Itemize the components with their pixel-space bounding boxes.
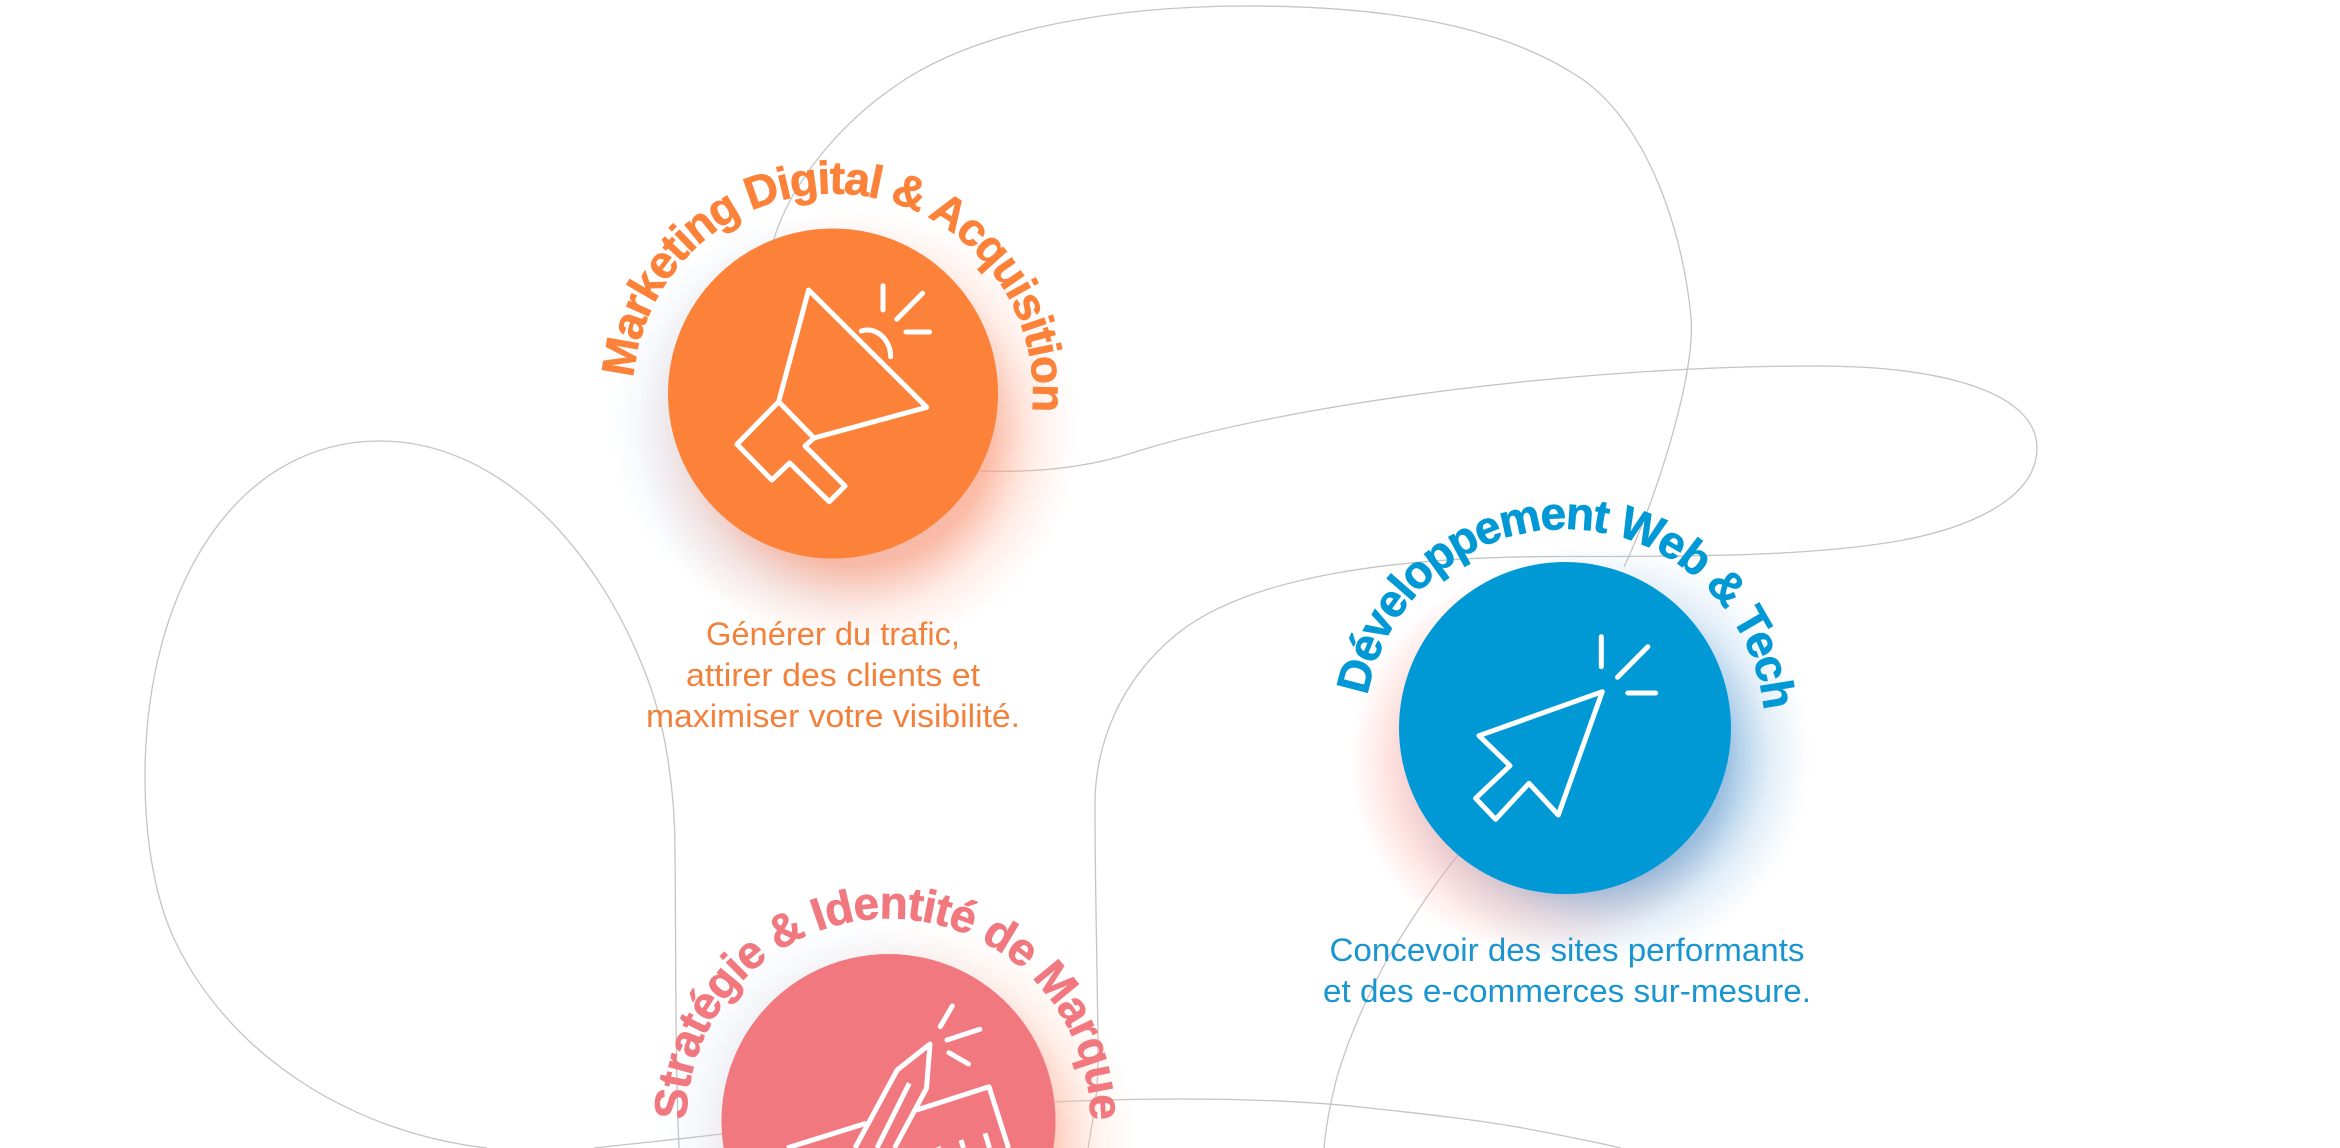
heading: stratégie de marque: Stratégie & Identité de Marque	[654, 888, 1116, 1119]
description: marketing digital: Générer du trafic,	[706, 616, 960, 652]
description: développement web: et des e-commerces sur-mesure.	[1323, 973, 1811, 1009]
description: marketing digital: maximiser votre visibilité.	[646, 698, 1020, 734]
circle shadow: développement	[1350, 543, 1812, 967]
description: développement web	[1323, 932, 1811, 1009]
circle: stratégie	[722, 954, 1056, 1148]
icon: cursor arrow	[1476, 637, 1656, 819]
panel: stratégie de marque	[654, 888, 1116, 1148]
panel: marketing digital	[602, 160, 1062, 734]
circle shadow: marketing	[605, 205, 1085, 660]
circle: développement	[1399, 562, 1731, 894]
heading: développement web: Développement Web & Tech	[1336, 502, 1795, 708]
heading: marketing digital: Marketing Digital & Acquisition	[602, 160, 1062, 410]
icon: pencil and book	[787, 1006, 1008, 1148]
description: développement web: Concevoir des sites performants	[1330, 932, 1804, 968]
panel: développement web	[1323, 502, 1811, 1009]
circle shadow: stratégie	[660, 920, 1140, 1148]
icon: megaphone	[737, 286, 930, 502]
description: marketing digital: attirer des clients et	[686, 657, 980, 693]
description: marketing digital	[646, 616, 1020, 734]
circle: marketing	[668, 228, 998, 558]
